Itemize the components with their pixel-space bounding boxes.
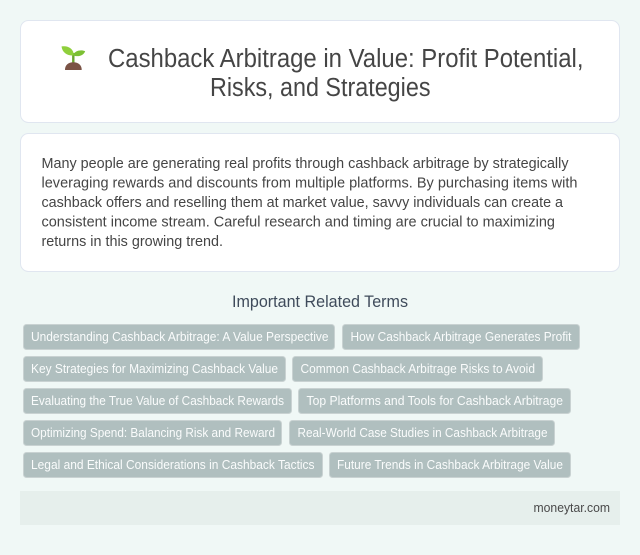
footer bar bbox=[20, 491, 620, 525]
title: Risks, and Strategies bbox=[210, 74, 430, 102]
tag: How Cashback Arbitrage Generates Profit bbox=[350, 329, 572, 344]
intro paragraph: Many people are generating real profits through cashback arbitrage by strategically bbox=[42, 155, 569, 172]
tags list bbox=[24, 324, 580, 478]
tag bbox=[292, 356, 542, 382]
panel: intro text card bbox=[20, 134, 620, 272]
intro paragraph: consistent income stream. Careful research and timing are crucial to maximizing bbox=[42, 214, 555, 231]
tag: Understanding Cashback Arbitrage: A Value Perspective bbox=[31, 329, 328, 344]
tag: Real-World Case Studies in Cashback Arbitrage bbox=[298, 425, 548, 440]
heading: important related terms: Important Related Terms bbox=[232, 293, 408, 311]
icon: sprout bbox=[62, 46, 85, 70]
tag: Legal and Ethical Considerations in Cashback Tactics bbox=[31, 457, 315, 472]
tag bbox=[24, 388, 292, 414]
tag bbox=[24, 420, 282, 446]
tag bbox=[24, 324, 334, 350]
tag: Key Strategies for Maximizing Cashback Value bbox=[31, 361, 278, 376]
tag bbox=[330, 452, 570, 478]
tag bbox=[24, 452, 322, 478]
intro paragraph bbox=[42, 155, 578, 250]
intro paragraph: cashback offers and reselling them at market value, savvy individuals can create a bbox=[42, 194, 564, 211]
tag bbox=[290, 420, 554, 446]
tag: Evaluating the True Value of Cashback Rewards bbox=[31, 393, 284, 408]
tag bbox=[24, 356, 286, 382]
footer source: moneytar.com bbox=[534, 501, 610, 515]
title: Cashback Arbitrage in Value: Profit Potential, bbox=[108, 45, 584, 73]
panel: title card bbox=[20, 20, 620, 122]
tag: Optimizing Spend: Balancing Risk and Reward bbox=[31, 425, 275, 440]
tag: Top Platforms and Tools for Cashback Arbitrage bbox=[306, 393, 563, 408]
intro paragraph: returns in this growing trend. bbox=[42, 233, 223, 250]
tag bbox=[298, 388, 570, 414]
title bbox=[108, 45, 584, 102]
tag: Future Trends in Cashback Arbitrage Value bbox=[337, 457, 563, 472]
tag: Common Cashback Arbitrage Risks to Avoid bbox=[300, 361, 535, 376]
tag bbox=[342, 324, 580, 350]
intro paragraph: leveraging rewards and discounts from multiple platforms. By purchasing items with bbox=[42, 175, 578, 192]
